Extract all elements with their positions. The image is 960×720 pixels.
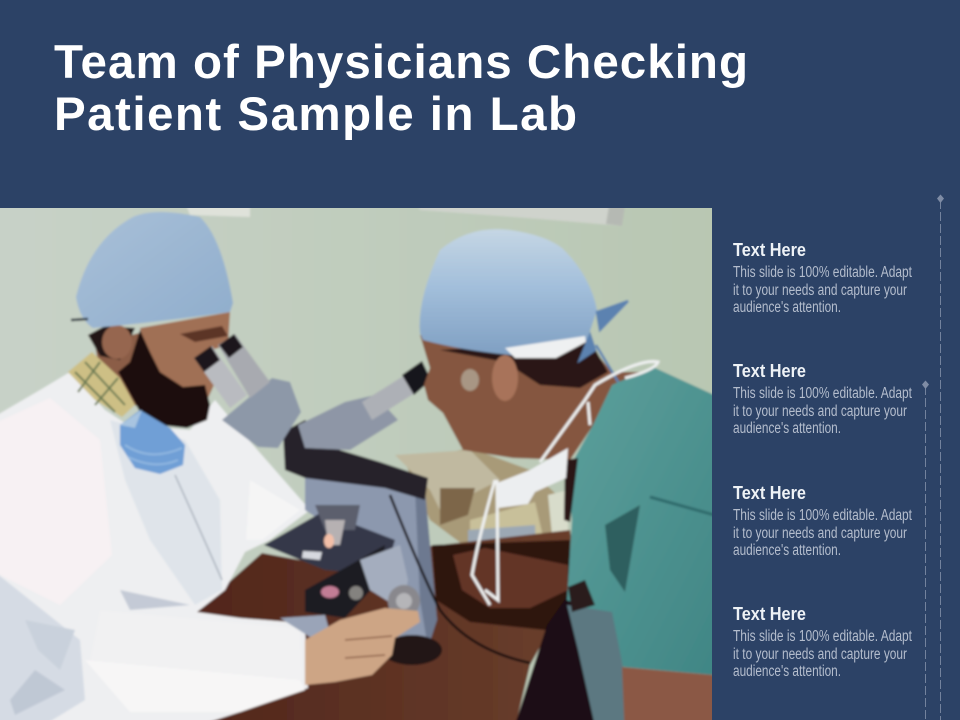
- text block 1: [733, 239, 913, 316]
- sleeve shadow: [605, 505, 640, 592]
- eyebrow: [180, 326, 228, 342]
- scrub lower panel: [567, 605, 626, 720]
- title: [54, 36, 748, 141]
- text block 3: Text Here: [733, 482, 806, 503]
- pen pocket: [568, 580, 595, 612]
- head and neck: [420, 335, 640, 460]
- neck and skin: [95, 332, 141, 406]
- surgical cap: [420, 229, 597, 355]
- text block 2: it to your needs and capture your: [733, 403, 907, 420]
- white cap band: [505, 336, 586, 358]
- dark floor: [514, 598, 596, 720]
- title: Team of Physicians Checking: [54, 36, 748, 89]
- stage: [264, 512, 395, 575]
- silver panel: [360, 545, 408, 610]
- left hand on focus knob: [305, 608, 420, 685]
- cap tie: [71, 319, 88, 320]
- dark focus block: [305, 545, 385, 618]
- beard: [118, 330, 210, 428]
- text block 4: Text Here: [733, 603, 806, 624]
- wall: [0, 190, 730, 720]
- right binocular arm: [298, 395, 398, 450]
- upper arm: [622, 667, 725, 720]
- text block 1: Text Here: [733, 239, 806, 260]
- timeline: outer dashed line: [937, 194, 944, 720]
- text block 3: it to your needs and capture your: [733, 525, 907, 542]
- text block 3: [733, 482, 913, 559]
- focus knob: [388, 585, 420, 617]
- microscope: [194, 334, 530, 665]
- right hand on desk: [453, 548, 568, 608]
- text block 4: This slide is 100% editable. Adapt: [733, 628, 913, 645]
- text block 3: This slide is 100% editable. Adapt: [733, 507, 913, 524]
- hair: [88, 326, 135, 360]
- right eyepiece: [362, 361, 431, 420]
- base column: [305, 478, 437, 650]
- text block 1: it to your needs and capture your: [733, 282, 907, 299]
- photo: two physicians at a microscope: [0, 190, 730, 720]
- desk: [196, 528, 572, 720]
- picture frames on wall: [186, 208, 624, 226]
- surgical cap: [76, 212, 233, 328]
- text block 4: it to your needs and capture your: [733, 646, 907, 663]
- dark strip at scrub edge: [564, 458, 578, 522]
- dark body: [283, 420, 428, 500]
- objectives and light: [315, 505, 360, 548]
- suit: [0, 372, 310, 720]
- dust mask: [120, 410, 185, 474]
- dark shadow around hand: [432, 540, 570, 630]
- text block 3: audience's attention.: [733, 542, 841, 559]
- text block 4: [733, 603, 913, 680]
- text block 2: Text Here: [733, 360, 806, 381]
- text block 2: audience's attention.: [733, 420, 841, 437]
- hanging mask: [497, 448, 568, 508]
- text block 4: audience's attention.: [733, 663, 841, 680]
- suit shading: [0, 398, 305, 720]
- power cable: [390, 495, 530, 663]
- title: Patient Sample in Lab: [54, 88, 577, 141]
- base foot: [382, 635, 442, 665]
- left head housing: [222, 378, 301, 448]
- right physician: [420, 229, 725, 720]
- grey temple hair: [461, 369, 479, 391]
- text block 2: This slide is 100% editable. Adapt: [733, 385, 913, 402]
- lower plate: [280, 615, 330, 637]
- left physician: [0, 212, 310, 720]
- ear: [102, 325, 132, 359]
- timeline: inner dashed line: [922, 380, 929, 720]
- face: [140, 312, 230, 405]
- scrub top: [567, 367, 725, 676]
- mask straps: [472, 361, 658, 605]
- left eyepieces: [194, 334, 270, 408]
- plaid collar: [68, 352, 135, 417]
- text block 1: audience's attention.: [733, 299, 841, 316]
- background papers: [395, 448, 568, 550]
- text block 1: This slide is 100% editable. Adapt: [733, 264, 913, 281]
- text block 2: [733, 360, 913, 437]
- cap ties: [580, 301, 628, 385]
- ear: [492, 355, 518, 401]
- sleeve fold: [650, 497, 725, 518]
- hair: [440, 340, 608, 388]
